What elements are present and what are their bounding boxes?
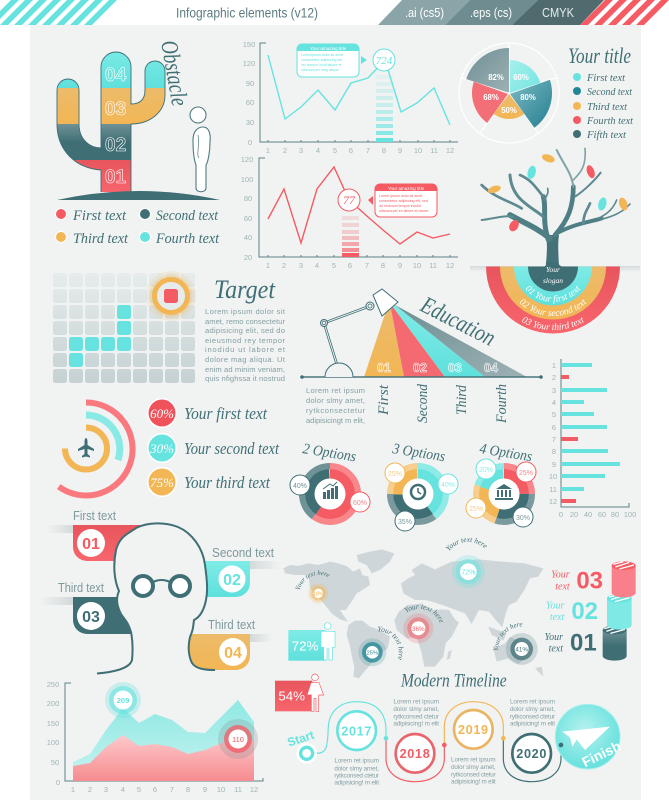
chart: area chart: 50	[51, 758, 59, 767]
target paragraph: enim ad minim veniam,	[205, 365, 285, 374]
slogan semicircle stack: 02 Your second text	[520, 299, 586, 316]
chart: horizontal bar chart: 20	[570, 510, 578, 519]
head outline	[97, 523, 215, 674]
slogan text: Your	[546, 265, 560, 274]
callout: Lorem ipsum dolor sit amet	[379, 194, 422, 198]
chart: red line chart: 6	[348, 261, 352, 270]
panel: 4 options donut: 4 Options	[478, 441, 533, 465]
chart: red line chart: 60	[244, 214, 252, 223]
slogan semicircle stack	[470, 264, 640, 334]
cactus	[56, 52, 166, 192]
rotated labels: Second	[415, 383, 431, 423]
badge 110	[218, 719, 258, 759]
chart: area chart: 11	[234, 785, 242, 794]
timeline text above 2018: adipisicing! m elit	[393, 720, 439, 727]
chart: cyan line chart	[243, 40, 458, 155]
panel: obstacle cactus	[50, 39, 220, 247]
map badge 25%: Your text here	[378, 626, 404, 660]
chart: pie chart: 60%	[513, 73, 529, 82]
chart: area chart: 3	[104, 785, 108, 794]
chart: cyan line chart: 6	[349, 146, 353, 155]
slogan text	[543, 265, 563, 285]
format tab: ai: .ai (cs5)	[405, 6, 444, 20]
timeline dots	[384, 736, 563, 747]
finish node	[555, 704, 623, 770]
year 2017: 2017	[341, 724, 372, 738]
icon: lamp	[320, 289, 398, 377]
tab 02: Second text	[212, 546, 274, 560]
chart: area chart: 9	[203, 785, 207, 794]
target marker	[146, 271, 196, 321]
chart: area chart: 100	[47, 738, 59, 747]
person icon	[190, 107, 210, 192]
value marker: 724	[376, 55, 393, 67]
chart: area chart: 250	[47, 680, 59, 689]
timeline text below 2017: Lorem ret ipsum	[334, 758, 379, 765]
item: second	[147, 433, 280, 463]
target title: Target	[214, 275, 276, 304]
tree icon	[482, 148, 630, 267]
bubble 60%: 60%	[353, 500, 367, 507]
map badge 18%: Your text here	[295, 570, 330, 590]
callout: consectetur adipiscing elit, sed	[379, 199, 428, 203]
red cylinder	[612, 561, 636, 597]
pie legend: Fifth text	[586, 129, 627, 141]
chart: horizontal bar chart: 9	[552, 460, 556, 469]
stack labels: Your	[551, 569, 570, 580]
map badge 41%: 41%	[515, 647, 528, 654]
format tab: eps	[445, 0, 538, 25]
start node	[286, 728, 317, 764]
target paragraph: eieusmod rey tempor	[205, 336, 285, 345]
chart: cyan line chart: 0	[248, 138, 252, 147]
icon: bar chart	[323, 482, 338, 499]
target paragraph: adipisicing elit, sed do	[205, 326, 285, 335]
cactus legend: Second text	[156, 208, 219, 224]
tab 04: Third text	[208, 618, 255, 632]
header bar	[0, 0, 669, 25]
badge 209: 209	[117, 696, 129, 705]
timeline text below 2019	[451, 756, 496, 785]
icon: clock	[411, 485, 425, 499]
chart: cyan line chart: 10	[414, 146, 422, 155]
format tab: CMYK	[512, 0, 604, 25]
badge 110: 110	[232, 735, 244, 744]
item: second: 30%	[149, 441, 174, 456]
chart: cyan line chart: 11	[430, 146, 438, 155]
item: third	[147, 467, 271, 497]
chart: horizontal bar chart: 5	[552, 410, 556, 419]
chart: pie chart: 80%	[520, 93, 536, 102]
bubble 40%: 40%	[293, 483, 307, 490]
chart: red line chart: 12	[446, 261, 454, 270]
chart: cyan line chart: 5	[333, 146, 337, 155]
stack labels: text	[550, 612, 565, 623]
chart: area chart: 150	[47, 719, 59, 728]
panel: 3 options donut: 3 Options	[390, 441, 446, 465]
chart: horizontal bar chart: 11	[549, 485, 557, 494]
chart: area chart: 2	[88, 785, 92, 794]
timeline text below 2019: Lorem ret ipsum	[451, 756, 496, 763]
chart: cyan line chart: 3	[299, 146, 303, 155]
rotated labels: Fourth	[494, 384, 510, 424]
chart: pie chart: 50%	[501, 106, 517, 115]
chart: horizontal bar chart: 7	[552, 435, 556, 444]
cactus legend: First text	[72, 208, 127, 224]
cylinder stack	[603, 561, 636, 661]
year 2018: 2018	[400, 747, 430, 761]
cyan path cells	[69, 305, 131, 367]
education paragraph: dolor slmy amet,	[306, 396, 365, 405]
icon: airplane	[78, 438, 94, 458]
map badge 72%	[446, 538, 487, 588]
chart: red line chart: 4	[315, 261, 319, 270]
chart: area chart: 6	[153, 785, 157, 794]
timeline text below 2019: adipisicing! m elit	[451, 778, 496, 785]
timeline text below 2017	[334, 758, 379, 787]
chart: area chart: 12	[250, 785, 258, 794]
cactus: 01	[105, 167, 127, 188]
obstacle title: Obstacle	[155, 39, 192, 108]
badge 209	[105, 682, 141, 718]
callout: do eiusmod tempor incidid	[379, 204, 421, 208]
year 2020	[512, 734, 551, 773]
timeline text above 2018: rytkconsed ctetur	[393, 713, 439, 720]
step numbers: 02	[413, 361, 427, 375]
year 2017	[337, 711, 376, 750]
timeline text above 2020: Lorem ret ipsum	[510, 698, 555, 705]
callout: consectetur adipiscing elit	[301, 58, 342, 62]
format tab: CMYK: CMYK	[542, 6, 575, 20]
cactus: 02	[105, 135, 126, 156]
chart: red line chart: 5	[332, 261, 336, 270]
chart: horizontal bar chart: 8	[552, 447, 556, 456]
chart: cyan line chart: 9	[398, 146, 402, 155]
tab 04	[185, 618, 255, 670]
icon: bank	[495, 484, 513, 500]
map badge 36%	[403, 605, 443, 644]
chart: area chart: 4	[121, 785, 125, 794]
item: third: 75%	[150, 475, 174, 490]
panel: 2 options donut: 2 Options	[301, 441, 357, 465]
chart: red line chart: 10	[413, 261, 421, 270]
step numbers	[377, 361, 498, 375]
panel: map, stacks and timeline	[275, 538, 636, 787]
chart: horizontal bar chart: 6	[552, 423, 556, 432]
chart: horizontal bar chart: 3	[552, 386, 556, 395]
map badge 25%	[358, 626, 404, 666]
chart: area chart: 10	[217, 785, 225, 794]
chart: cyan line chart: 7	[366, 146, 370, 155]
chart: horizontal bar chart: 12	[549, 497, 557, 506]
panel: 2 options donut	[290, 441, 370, 522]
map badge 25%: 25%	[367, 651, 378, 657]
chart: cyan line chart: 90	[246, 79, 254, 88]
cactus legend: Fourth text	[155, 231, 220, 247]
chart: cyan line chart: 60	[246, 98, 254, 107]
bubble 35%: 35%	[398, 519, 412, 526]
stack labels: 01	[570, 630, 597, 657]
callout: ullamcorper ex labore et dolore	[379, 209, 429, 213]
start node: Start	[286, 728, 316, 750]
timeline text above 2018: dolor slmy amet,	[393, 706, 439, 713]
chart: red line chart: 80	[244, 194, 252, 203]
callout: rec tempor incid labore et	[301, 63, 342, 67]
stack labels	[544, 567, 603, 657]
female stat 54%: 54%	[278, 689, 305, 704]
map badge 18%: 18%	[313, 592, 324, 598]
chart: red line chart: 3	[299, 261, 303, 270]
item: first	[147, 398, 268, 428]
callout	[368, 184, 437, 217]
cyan cylinder	[607, 594, 632, 630]
item: first: Your first text	[184, 404, 268, 423]
timeline connectors	[317, 702, 561, 782]
chart: horizontal bar chart: 10	[549, 472, 557, 481]
timeline text below 2019: rytkconsed ctetur	[451, 771, 496, 778]
pie legend: Third text	[587, 101, 628, 113]
chart: cyan line chart: 30	[246, 118, 254, 127]
tab 02: 02	[223, 572, 241, 589]
header title: Infographic elements (v12)	[176, 6, 318, 20]
step numbers: 04	[484, 361, 498, 375]
callout: Your amazing title	[388, 186, 425, 191]
education paragraph: rytkconsectetur	[306, 406, 365, 415]
bubble 20%: 20%	[479, 467, 493, 474]
finish node: Finish	[579, 738, 623, 770]
item: third: Your third text	[184, 473, 271, 492]
chart: area chart: 1	[71, 785, 75, 794]
target paragraph	[205, 307, 286, 383]
bubble 25%: 25%	[388, 471, 402, 478]
map badge 41%: Your text here	[493, 623, 522, 650]
chart: pie chart: 68%	[483, 93, 499, 102]
education paragraph	[306, 386, 365, 425]
chart: red line chart: 8	[381, 261, 385, 270]
cactus legend: Third text	[73, 231, 129, 247]
tab 03	[58, 581, 135, 634]
timeline text below 2017: dolor slmy amet,	[334, 765, 379, 772]
map badge 72%: 72%	[461, 569, 475, 576]
ground	[57, 191, 220, 200]
chart: red line chart: 9	[398, 261, 402, 270]
timeline text above 2020: rytkconsed ctetur	[510, 713, 555, 720]
cactus: 03	[105, 99, 126, 120]
chart: red line chart	[241, 155, 458, 270]
tab 01: 01	[82, 536, 100, 553]
percentage list	[147, 398, 280, 497]
chart: red line chart: 11	[429, 261, 437, 270]
tab 03: Third text	[58, 581, 104, 595]
timeline title: Modern Timeline	[400, 671, 507, 692]
dark cylinder	[603, 626, 627, 661]
tab 02	[190, 546, 274, 597]
cactus: 04	[105, 65, 127, 86]
chart: horizontal bar chart	[549, 359, 636, 519]
panel: 3 options donut	[385, 441, 458, 531]
rotated labels	[376, 383, 510, 424]
step numbers: 01	[377, 361, 391, 375]
year 2019	[454, 710, 493, 749]
callout: Your amazing title	[310, 46, 347, 51]
leaves	[487, 153, 629, 233]
chart: red line chart: 20	[244, 253, 252, 262]
timeline text above 2020: dolor slmy amet,	[510, 706, 555, 713]
pie legend: First text	[586, 72, 626, 84]
chart: pie chart	[459, 43, 559, 143]
value marker	[338, 189, 360, 211]
value marker	[373, 49, 395, 71]
map badge 36%: 36%	[412, 626, 425, 633]
male stat 72%: 72%	[292, 639, 318, 654]
callout: Loremipsum dolor sit amet	[301, 53, 343, 57]
chart: horizontal bar chart: 1	[552, 361, 556, 370]
target paragraph: Lorem ipsum dolor sit	[205, 307, 286, 316]
target paragraph: inodidu ut labore et	[205, 345, 286, 354]
chart: red line chart: 100	[241, 175, 253, 184]
chart: red line chart: 2	[282, 261, 286, 270]
chart: area chart: 200	[47, 699, 59, 708]
pie legend: Second text	[587, 86, 633, 98]
timeline text below 2019: dolor slmy amet,	[451, 764, 496, 771]
tab 01: First text	[73, 509, 116, 523]
chart: cyan line chart: 120	[243, 59, 255, 68]
chart: area chart	[47, 680, 263, 794]
female stat 54%	[275, 674, 324, 711]
baseline	[300, 375, 543, 379]
radial progress rings	[59, 402, 133, 495]
year 2020: 2020	[516, 747, 547, 761]
world map	[283, 549, 543, 678]
panel: target grid	[53, 271, 196, 383]
chart: red line chart: 7	[365, 261, 369, 270]
chart: red line chart: 40	[244, 233, 252, 242]
chart: area chart: 8	[186, 785, 190, 794]
bubble 25%: 25%	[469, 506, 483, 513]
target paragraph: dolore mag aliqua. Ut	[205, 355, 286, 364]
slogan semicircle stack: 03 Your third text	[522, 317, 584, 330]
red corner stripes	[580, 0, 669, 25]
chart: cyan line chart: 1	[266, 146, 270, 155]
pie legend	[573, 72, 634, 141]
stack labels: Your	[544, 632, 563, 643]
slogan text: slogan	[543, 276, 563, 285]
target paragraph: amet, remo consectetur	[205, 317, 285, 326]
chart: area chart: 5	[137, 785, 141, 794]
glasses	[133, 576, 190, 596]
panel: education lamp	[300, 289, 543, 424]
chart: horizontal bar chart: 2	[552, 373, 556, 382]
chart: cyan line chart: 4	[316, 146, 320, 155]
cactus legend	[55, 208, 220, 247]
map badge 36%: Your text here	[404, 605, 443, 623]
education paragraph: adipisicingt m elit,	[306, 416, 365, 425]
education paragraph: Lorem ret ipsum	[306, 386, 365, 395]
chart: cyan line chart: 150	[243, 40, 255, 49]
education title: Education	[416, 292, 499, 352]
callout	[297, 44, 367, 77]
pie legend: Fourth text	[586, 115, 634, 127]
chart: red line chart: 120	[241, 155, 253, 164]
stack labels: Your	[546, 600, 564, 611]
panel: head with numbered tabs	[40, 509, 280, 674]
light beams	[364, 305, 527, 377]
chart: cyan line chart: 12	[446, 146, 454, 155]
tab 04: 04	[224, 645, 242, 662]
map badge 72%: Your text here	[446, 538, 487, 551]
stack labels: 03	[576, 567, 603, 594]
stack labels: 02	[571, 598, 598, 625]
timeline text above 2018: Lorem ret ipsum	[393, 698, 439, 705]
slogan semicircle stack: 01 Your first text	[526, 286, 580, 304]
year 2018	[396, 734, 434, 773]
chart: horizontal bar chart: 0	[559, 510, 563, 519]
timeline text above 2020: adipisicing! m elit	[510, 720, 555, 727]
chart: horizontal bar chart: 80	[611, 510, 619, 519]
cyan corner stripes	[0, 0, 117, 25]
chart: cyan line chart: 2	[283, 146, 287, 155]
callout: ullamcorper mag aliqua	[301, 68, 338, 72]
year 2019: 2019	[458, 723, 489, 737]
rotated labels: Third	[454, 384, 470, 415]
stack labels: text	[549, 644, 563, 655]
value marker: 77	[343, 193, 356, 207]
stack labels: text	[555, 581, 570, 592]
timeline text below 2017: rytkconsed ctetur	[334, 773, 379, 780]
chart: horizontal bar chart: 4	[552, 398, 556, 407]
timeline text above 2018	[393, 698, 439, 727]
timeline text above 2020	[510, 698, 555, 727]
bubble 30%: 30%	[516, 515, 530, 522]
bubble 40%: 40%	[441, 482, 455, 489]
male stat 72%	[288, 623, 335, 661]
format tab: eps: .eps (cs)	[470, 6, 512, 20]
timeline text below 2017: adipisicing! m elit	[334, 780, 379, 787]
tab 01	[73, 509, 145, 561]
chart: horizontal bar chart: 60	[598, 510, 606, 519]
item: second: Your second text	[184, 439, 280, 458]
bubble 25%: 25%	[519, 470, 533, 477]
map badge 41%	[493, 623, 538, 665]
tab 03: 03	[82, 609, 100, 626]
chart: red line chart: 1	[266, 261, 270, 270]
bar marker stripes	[342, 216, 359, 257]
rotated labels: First	[376, 384, 392, 416]
chart: horizontal bar chart: 100	[624, 510, 636, 519]
panel: 4 options donut	[466, 441, 536, 527]
map badge 18%	[295, 570, 330, 604]
chart: area chart: 7	[170, 785, 174, 794]
tab shadows	[40, 525, 280, 642]
chart: horizontal bar chart: 40	[584, 510, 592, 519]
pie title: Your title	[568, 43, 631, 68]
chart: area chart: 0	[56, 778, 60, 787]
bar marker stripes	[376, 75, 393, 142]
target paragraph: quis nfighssa it nostrud	[205, 374, 285, 383]
chart: pie chart: 82%	[488, 73, 504, 82]
format tab: ai	[378, 0, 470, 25]
item: first: 60%	[150, 406, 174, 421]
step numbers: 03	[448, 361, 462, 375]
chart: cyan line chart: 8	[382, 146, 386, 155]
